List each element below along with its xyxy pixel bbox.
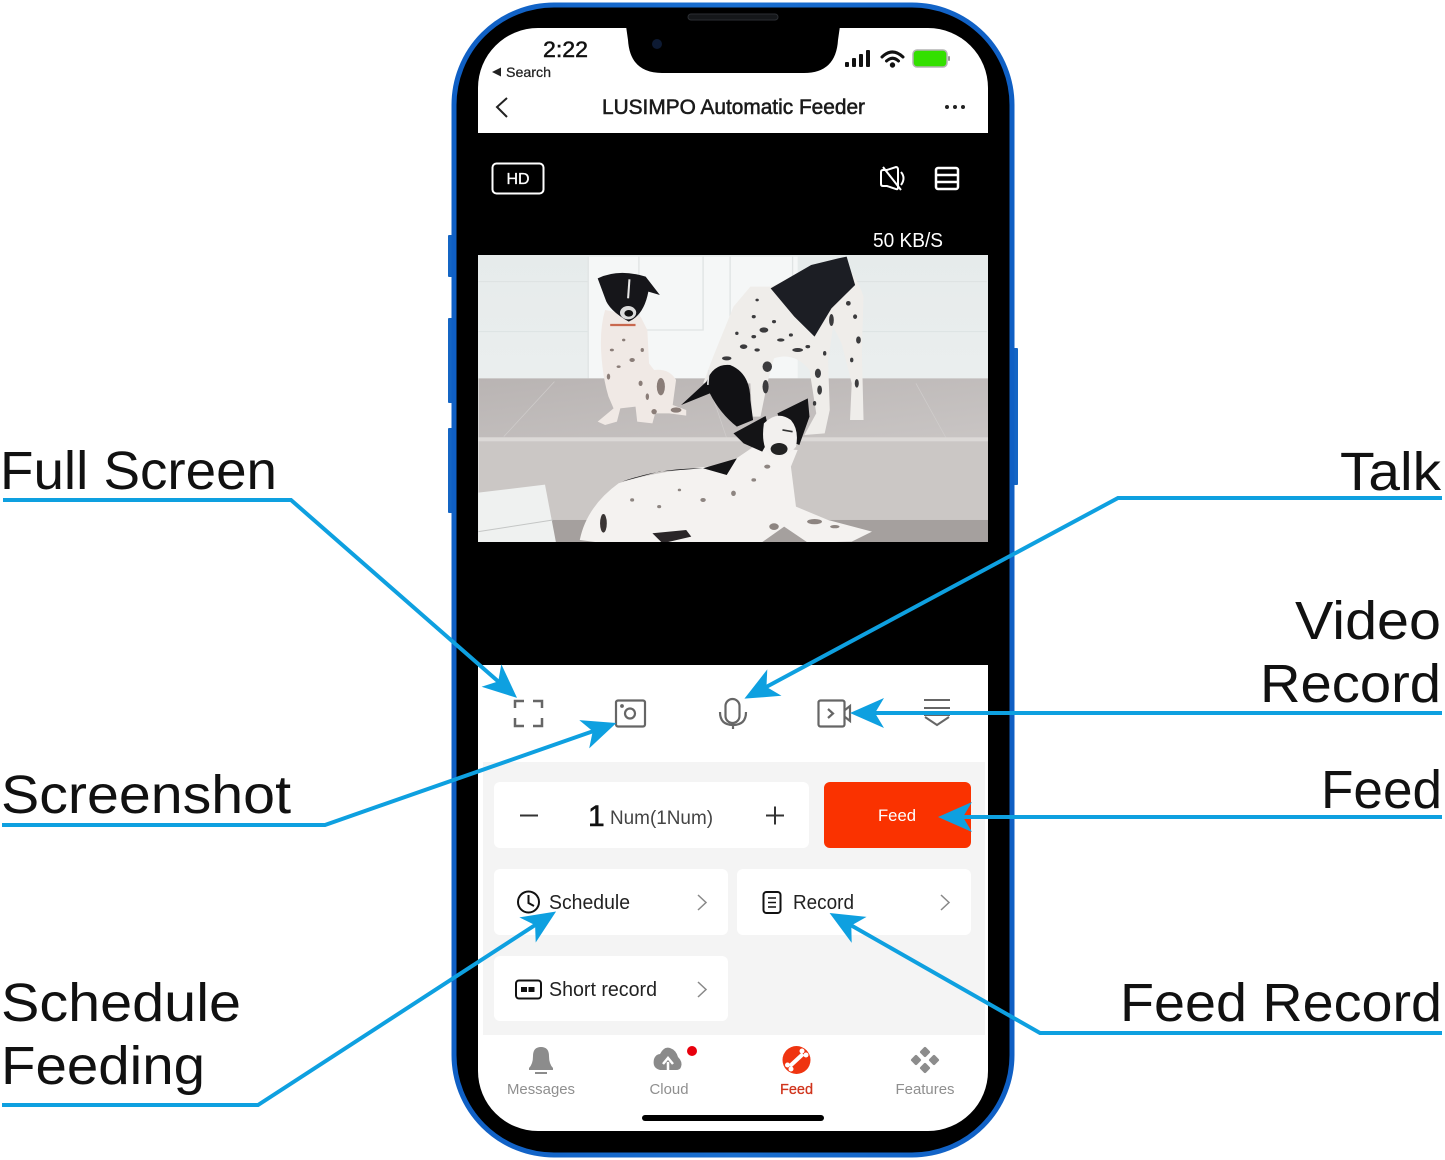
callout: Screenshot: Screenshot (1, 765, 291, 825)
callout: Full Screen: Full Screen (0, 441, 277, 501)
app header (497, 96, 965, 119)
callout: Video Record (862, 591, 1442, 714)
back chevron (497, 98, 507, 117)
app title: LUSIMPO Automatic Feeder (602, 96, 865, 119)
callout: Schedule Feeding (1, 918, 546, 1105)
control panel (478, 665, 988, 1035)
tab: cloud: Cloud (650, 1082, 688, 1098)
callout: Feed: Feed (1321, 760, 1442, 820)
callout: Schedule Feeding: Feeding (1, 1036, 205, 1096)
callout: Video Record: Record (1260, 654, 1441, 714)
callout: Screenshot (1, 727, 605, 825)
HD badge (492, 164, 544, 194)
record card (737, 869, 971, 935)
tab: feed: Feed (780, 1082, 813, 1098)
bottom tab bar (507, 1046, 954, 1121)
screen (478, 28, 988, 1131)
callout: Feed Record: Feed Record (1120, 973, 1442, 1033)
tab: messages: Messages (507, 1082, 575, 1098)
tab: features (896, 1046, 954, 1098)
phone (448, 5, 1018, 1155)
callout: Talk: Talk (1340, 442, 1442, 502)
side buttons (448, 235, 1018, 513)
icon: collapse menu (924, 700, 950, 725)
toolbar background (478, 665, 988, 765)
schedule card: Schedule (549, 892, 630, 914)
layout icon (936, 168, 958, 189)
callout: Schedule Feeding: Schedule (1, 973, 241, 1033)
more menu (945, 105, 965, 109)
battery icon (913, 50, 950, 67)
mute icon (881, 167, 904, 190)
feed button (824, 782, 971, 848)
quantity stepper (494, 782, 809, 848)
back to search: Search (506, 64, 551, 80)
schedule card (494, 869, 728, 935)
quantity stepper: 1 (588, 800, 605, 833)
notch (626, 26, 840, 73)
photo of three dogs (478, 255, 989, 543)
HD badge: HD (506, 171, 530, 188)
video panel (478, 133, 988, 665)
phone frame (454, 5, 1012, 1155)
clock: 2:22 (543, 37, 588, 62)
bitrate: 50 KB/S (873, 230, 943, 252)
short record card: Short record (549, 979, 657, 1001)
tab: features: Features (896, 1082, 954, 1098)
tab: messages (507, 1047, 575, 1098)
video background (478, 133, 988, 665)
icon: video record (818, 700, 850, 726)
signal icon (845, 50, 870, 67)
wifi icon (882, 52, 903, 66)
wall and steps (478, 257, 989, 543)
callout: Feed Record (840, 919, 1442, 1033)
tab: cloud (650, 1046, 697, 1098)
record card: Record (793, 892, 854, 914)
home indicator (642, 1115, 824, 1121)
short record card (494, 956, 728, 1021)
quantity stepper: Num(1Num) (610, 808, 713, 829)
callout: Full Screen (0, 441, 508, 690)
grey content area (483, 762, 985, 1035)
icon: screenshot (616, 700, 645, 726)
speaker (688, 14, 778, 20)
dog lying in front (580, 398, 872, 543)
dog standing right (681, 257, 864, 435)
icon: full screen (515, 701, 542, 726)
dog sitting left (598, 273, 686, 425)
icon: microphone (720, 699, 746, 729)
callout: Talk (755, 442, 1442, 693)
callout: Video Record: Video (1295, 591, 1441, 651)
front camera (652, 39, 662, 49)
tab: feed (780, 1046, 813, 1098)
feed button: Feed (878, 806, 916, 825)
status bar (492, 37, 950, 80)
